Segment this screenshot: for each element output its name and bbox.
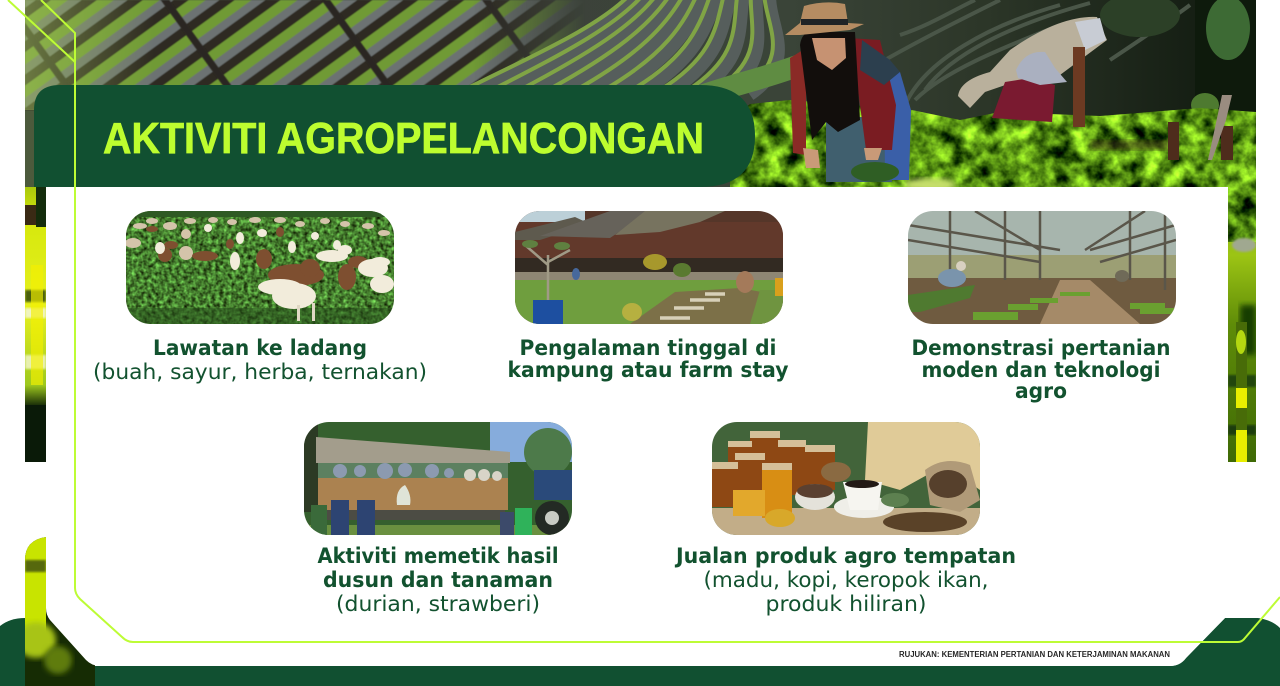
label: dusun dan tanaman <box>323 568 553 592</box>
plastic tunnel cover <box>958 17 1107 108</box>
activity: fruit picking <box>304 422 572 616</box>
activity: farm visit <box>93 211 427 384</box>
label <box>912 336 1170 403</box>
label: Demonstrasi pertanian <box>912 336 1170 360</box>
label: (madu, kopi, keropok ikan, <box>704 568 988 592</box>
white page area below right strip <box>1228 462 1280 618</box>
title: AKTIVITI AGROPELANCONGAN <box>103 114 704 163</box>
label: Aktiviti memetik hasil <box>318 544 558 568</box>
label: Jualan produk agro tempatan <box>674 544 1016 568</box>
title banner <box>34 85 755 187</box>
label: moden dan teknologi <box>922 358 1160 382</box>
photo: goats grazing <box>125 211 394 324</box>
curved terrace rows, middle <box>464 0 800 100</box>
farmer with hat <box>785 2 911 182</box>
label: produk hiliran) <box>766 592 926 616</box>
leafy crop field <box>730 100 1256 187</box>
label: kampung atau farm stay <box>508 358 789 382</box>
label: (durian, strawberi) <box>336 592 540 616</box>
second farmer <box>992 47 1085 127</box>
fence posts and tools <box>1168 95 1233 160</box>
activity: village stay <box>508 211 789 382</box>
label: Lawatan ke ladang <box>153 336 367 360</box>
green footer band with corners <box>0 618 1280 686</box>
label <box>508 336 789 382</box>
label: agro <box>1015 379 1067 403</box>
terraced crop rows, left <box>25 0 585 110</box>
photo: greenhouse <box>908 211 1176 324</box>
label <box>674 544 1016 616</box>
photo: wooden chalets <box>515 211 783 324</box>
label: Pengalaman tinggal di <box>520 336 776 360</box>
left photo strip <box>25 187 46 465</box>
background photo: farm terraces and workers <box>25 0 1256 465</box>
activity: modern farming demo <box>908 211 1176 403</box>
photo: durian tour wagon <box>304 422 572 535</box>
source reference: RUJUKAN: KEMENTERIAN PERTANIAN DAN KETERJAMINAN MAKANAN <box>899 649 1170 659</box>
right photo strip <box>1228 187 1256 462</box>
label <box>93 336 427 384</box>
dark terraces, right <box>885 0 1190 105</box>
bottom-left photo fragment <box>25 537 95 686</box>
label <box>318 544 558 616</box>
photo: honey, coffee, crackers <box>712 422 980 535</box>
white content panel <box>46 187 1228 666</box>
label: (buah, sayur, herba, ternakan) <box>93 360 427 384</box>
activity: local agro products <box>674 422 1016 616</box>
dark trees, far right <box>1100 0 1250 110</box>
